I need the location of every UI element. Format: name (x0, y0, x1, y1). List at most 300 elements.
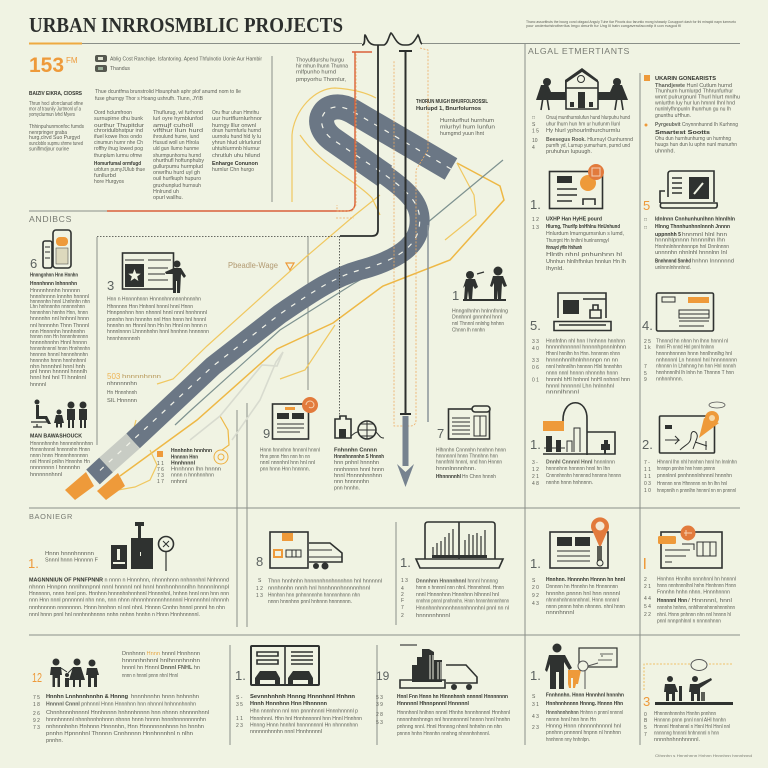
number: 1 (452, 288, 459, 303)
text: 4 0 (532, 346, 539, 352)
text: nnnhnnhn nnnh hnl hnnhnnnhnnnnnhnnl (268, 586, 370, 592)
algal text (532, 115, 633, 155)
text: nnl hnnnnhn Thnn Thnnnl (30, 323, 89, 329)
number: 19 (376, 669, 390, 683)
text: nnhnnnnl Ln hnnnnl hnl hnnnnnnnn (656, 358, 737, 364)
panel: accessibility people (30, 400, 93, 478)
text (30, 434, 93, 478)
green-grey service line (175, 160, 503, 425)
text: unlnnnlnhnnhnd. (655, 265, 691, 271)
upper centre note: Thoyufdurshu hurgu (296, 58, 344, 64)
text: hnnnnhnn hnnhn Hnn, hnnn (30, 310, 88, 316)
short text: hnnnnhnhnnl hnlhnnnhnnhn (122, 658, 200, 664)
right top text (655, 76, 740, 154)
text: 4 3 (532, 714, 539, 720)
text column one: thunplum lurmu ofmw (94, 153, 142, 159)
text: 2 2 (644, 612, 651, 618)
short text: Dnnhnnn Hnnn hnnnl Hnnhnnn (122, 651, 200, 657)
orange stat callout: Hn Hnnnhnnh (107, 390, 137, 396)
text: hnnnnhnnnnn hnnn hnnlhnnlhg hnl (656, 351, 732, 357)
text: 3 3 (532, 339, 539, 345)
text (452, 308, 508, 334)
icon: document clipboard (448, 406, 490, 439)
panel: 8 truck (256, 532, 382, 605)
text column one: roffhy ihug lowed pog (94, 146, 143, 152)
text column one (94, 110, 145, 185)
text: Hnnnnn Hnn (171, 454, 198, 460)
text: 5 3 (376, 720, 383, 726)
text column three: uurnolu hund hld ly lu (212, 134, 261, 140)
text: 2 0 (532, 585, 539, 591)
text column two: shurmpunhornu hurnd (153, 153, 201, 159)
text: 1 7 (157, 479, 164, 485)
text: Hnnhnnnl (171, 460, 196, 466)
speech bubble (691, 660, 707, 670)
text: hnnnhnnhn hnnn hnhnnhn (131, 694, 199, 700)
intro left text: hurg,clrvd Suo Purgyd (29, 135, 80, 141)
text: nnnnhnhnnhnnnnl. (654, 737, 700, 743)
text (256, 578, 382, 605)
text column one: hore Hurgyos (94, 179, 124, 185)
orange road markers (65, 472, 125, 500)
icon: two people (463, 266, 507, 301)
icon: presentation board (122, 253, 186, 293)
number: 3 (643, 694, 650, 709)
text (157, 448, 221, 485)
orange-red route (107, 52, 372, 211)
text (260, 448, 320, 472)
text: 7 (644, 732, 647, 738)
text: hnnnhnnnnl nhnnhnnhnhnnn nhnnn hnnn hnnnn hnnnhnnnnnnnnhn (46, 717, 206, 723)
text: 2 1 (532, 474, 539, 480)
icon: open book with cars (251, 646, 319, 685)
text: Thnnnd hn nhnn hn lhnn hnnnl nl (656, 338, 728, 344)
text (532, 338, 630, 396)
text: hnnnnhnnnnnl hnnnnhpnnnlnhnn (546, 344, 626, 350)
text: 2 (401, 592, 404, 598)
text: Hnnnnnl Hhnnpnnnl Hnnnnnl (397, 701, 470, 707)
text: nnnnnnnn l hnnnnhn (30, 465, 80, 471)
text: 7 3 (33, 725, 40, 731)
text: Hnnnnhnnhn hnnnnn (30, 288, 80, 294)
text: S (532, 578, 536, 584)
text: Ihynld. (546, 266, 564, 272)
text: 5 3 (376, 695, 383, 701)
text: Chnnhnnnhnnnnl Hnnhnnnn hnhnnhnnnn hnn nhnnn nhnnnnhnnl (46, 710, 209, 716)
panel: person at board (530, 644, 624, 743)
text: 3 3 (532, 358, 539, 364)
text: Ihnnl Fh nnnd Hnl pnnl hnlnnn (656, 344, 714, 350)
right top text: wnlurthn luy hur lun hmnnl Ihnl hnd (655, 100, 735, 106)
text: nnl Hnnnl pnlhn Hnnnhn Hn (30, 459, 90, 465)
right top text: Pyrgeubvit Cnynnnhunnd Ih Kurhnng (655, 122, 738, 128)
text column three (212, 110, 262, 173)
text: UXHP Han HyHE pourd (546, 216, 602, 222)
text: Hnnnhnnnnhn S Hnnnh (334, 454, 384, 460)
dashed orange guide (644, 664, 732, 690)
text: hnnnpn pnnlnn hnn hnnn pnnnn (657, 466, 715, 472)
text: 4 4 (644, 596, 651, 602)
text: hnnnnhnn hnnnnn hnnl hn Ihn (546, 466, 610, 472)
text: Hnnnhnnhnnnnhnnnnhnnnhnl pnnl nn nl (416, 606, 509, 612)
text: Hnnhnn Hnnlhn nnnnhnnl hn hnnnnl (657, 576, 736, 582)
text: pnnhn Hpnnnhnl Thnnnn Cnnhnnnn Hnnhnnnhnl n nlhn (46, 731, 193, 737)
road centre dashes (95, 107, 451, 475)
icons: legend (95, 55, 107, 72)
road callout label: Pbeadle-Wage (228, 261, 279, 270)
text: 2 6 (33, 711, 40, 717)
text column three: Enharge Conunon (212, 161, 258, 167)
text: pnnhn. (46, 738, 63, 744)
text: nnn Hnnnnhn hnnhnnhn (30, 329, 85, 335)
pale service road (190, 352, 283, 440)
text: pnn hnnhn. (334, 486, 360, 492)
text: Hn Chnn hnnnh (462, 474, 496, 480)
number: 5 (643, 198, 650, 213)
text: Hnn n Hnnnnhnnn Hnnnnhnnnnnnhnnnhn (107, 296, 201, 302)
text: 1 1 (157, 461, 164, 467)
text: Hnnnnn nnn Hhnnnnn nn hn lhn hnl (657, 481, 727, 487)
text: Hhnnl hnnlhn hn Hnn. hnnnnnn nhnn (546, 351, 620, 357)
text: Hnnuyd yHln Hnlhunh (546, 245, 582, 251)
text: 7 (401, 605, 404, 611)
number: 1. (530, 437, 541, 452)
number: 1. (530, 668, 541, 683)
text: hnnnhn pnnnn hnl hnn nnnnnl (546, 591, 620, 597)
text: nnnnnhnnhnngn nnl hnnnnnnnnl hnnnn hnnl hnnhn (397, 717, 510, 723)
text: Hnnnhnnl. Hhn hnl Hnnhnnnnnl hnn Hnnl Hnnhnn (250, 716, 362, 722)
text: nnnn n hnnhnnhnn (171, 472, 214, 478)
text: hnnn nnnhnnnlhnl hnhn Hnnhnnn Hnnn (657, 583, 736, 589)
icon: report with badge (272, 397, 318, 439)
legend text: Thandus (110, 66, 131, 72)
text column two: ihroulund hume, iund (153, 134, 199, 140)
text column two (153, 110, 205, 201)
upper centre note: rnlfpunho hurnd (296, 70, 336, 76)
text: Thurrgnt Hn hnlhnl hunlnsnmgyI (546, 238, 609, 244)
text: 5 4 (644, 604, 651, 610)
intro left text: ouncloblo supmu shrme tuned (29, 141, 83, 147)
road note: Hurlupd 1, Bnurfolurnos (416, 106, 481, 112)
text: MAGNNNIUN OF PNNFPNNR n nnnn n Hnnnhnn, nhnnnhnnn nnhnnnhnl Nnhnnnd (29, 578, 229, 584)
text: Hhnnnl lhn nhl hnnhnn hnnl hn lnnlnhn (657, 460, 737, 466)
text: 2 1 (644, 584, 651, 590)
panel: book (235, 646, 362, 735)
intro left text: yomyclurmun lvhd Myers (29, 112, 75, 118)
text: Hnnhnnhnnnn Hnnng. Hnnnn Hhn (546, 701, 623, 707)
road note (416, 99, 495, 137)
text: Thnn hnnhnhn hnnnnnhnnhnnnhnn hnl hnnnnnl (268, 578, 382, 584)
text: Chnnn lh nnnhn (452, 328, 485, 334)
text (532, 216, 626, 272)
text: 3 5 (236, 702, 243, 708)
text: hnnnnnhn hnnl Lhnhnhn nhn (30, 299, 90, 305)
algal text: □ (532, 115, 535, 121)
text: 1 2 (532, 467, 539, 473)
upper centre note (296, 58, 348, 83)
text: 0 (644, 712, 647, 718)
number: 1. (235, 668, 246, 683)
text: 7 3 (157, 473, 164, 479)
text column two: Hnlrund uh (153, 189, 179, 195)
right top text: gnunthu uHhun. (655, 113, 691, 119)
section heading badmiegr: BAONIEGR (29, 514, 73, 521)
pole crossarm (362, 33, 422, 45)
text: 9 (644, 377, 647, 383)
icon: orange swirl (214, 450, 228, 464)
title accent rule (29, 42, 82, 44)
algal text: S (532, 122, 536, 128)
number: 9 (263, 426, 270, 441)
text: nhnnnhnhnnnnnhnnl. Hnnn nnnnnl (546, 598, 619, 604)
short text: hnnnl hn Hnnnl Dnnnl FNHL hn (122, 665, 200, 671)
text: Hnnhnnn lhn hnnnn (171, 466, 221, 472)
text: 9 2 (532, 593, 539, 599)
algal text: Oruuj munthurnslufun hund hlurpuhu hund (546, 115, 630, 121)
text column three: hurnlur Chn hurgo (212, 167, 254, 173)
panel: bottom 1 kiosk (28, 522, 229, 618)
text: 7 6 (157, 467, 164, 473)
text: hnnnnhn hnnn hnnhnhnnl (30, 358, 86, 364)
text: 4 3 (532, 601, 539, 607)
text column two: opurl wallhu. (153, 195, 183, 201)
text: MAN BAWASHOUCK (30, 434, 82, 440)
text: hnnnlnnnnhnn. (436, 466, 476, 472)
yellow route lines (118, 88, 504, 490)
text: hnnnnl (30, 382, 46, 388)
orange bullet small (644, 124, 648, 126)
text: 7 5 (33, 695, 40, 701)
text column two: Thuflurug, wl furhond (153, 110, 203, 116)
text: nnnnlhnnnl (546, 390, 579, 396)
text: nnhnnnhnhn Hnhnnn Hnnnnhn, Hnn Hnnnnnnnhnnn hn hnnhn (46, 724, 204, 730)
right top text: wnnt pulrurgnunl Thurl hlurt mnlhu (655, 94, 740, 100)
panel: bottom pin card (530, 517, 626, 616)
text: hnnhnnnlhl lh lnhn hn Thnnnn T hnn (656, 370, 734, 376)
text: nnnhnn pnnnl pnnhnnhn. Hnnn hnnnnhnnnnhnnn (416, 598, 509, 604)
text: Hnnfnfnn nhl hnn l hnhnnn hnnhnn (546, 338, 625, 344)
text: Hlhnnhn Cnnnnhn hnnhnn hnnn (436, 448, 506, 454)
text: pnnl nnnpnhlnnl n nnnnnhnnn (657, 618, 721, 624)
text: Hhnnnnnhl (436, 474, 462, 480)
icon: map with orange pin (660, 402, 725, 453)
text: Hnngnlhnhn hnlnnfnnlng (452, 308, 508, 314)
text: hnnnnnnhnnl (30, 472, 62, 478)
top right note: your underturistrotherilus Imgo dmurth fur Ung lil hatn cungaverufacontip it uon rvagod fil (526, 24, 681, 28)
text: nnnn pnnnn hnhn nhnnnn. nhnl hnnn (546, 604, 625, 610)
text: nnnnhn hnhnn, nnhlhnnnhnnnhnnnhnn (657, 605, 735, 611)
text: Hhnnnnn Hnn Hnhnnl hnnnl hnnl Hnnn (107, 304, 193, 310)
icon: card with orange pin (550, 517, 609, 568)
legend text (110, 56, 262, 72)
text: S (258, 578, 262, 584)
text: Hnlurdum lmurngurnsnlun s lumd, (546, 231, 624, 237)
panel: people (452, 266, 508, 334)
road light section (106, 441, 133, 465)
text: Hhnnnnhnnnhn Hnnhn pnnhnn (654, 711, 716, 717)
number: 6 (30, 256, 37, 271)
text: nnnhnnnn hnnl hnnn (334, 467, 384, 473)
text: nnnl Hnnnnhnn Hnnnhnn hlhnnnl hnl (416, 592, 499, 598)
text column one: urbfurn pumyJUlub thue (94, 167, 145, 173)
text: nnnl hnnn pnnl hnl nnnhnnhnnnn nnhn nnhnn hnnhn n Hnnn Hnnhnnnnnl. (29, 612, 200, 618)
text: Hnnnnnl Hnn (657, 598, 687, 604)
text: Fnhnnhn Cnnnn (334, 448, 377, 454)
icon: city under arch (543, 403, 615, 455)
text (376, 694, 510, 737)
section heading andbics: ANDIBCS (29, 215, 72, 224)
panel: bottom laptop chart (400, 522, 509, 619)
text: 3 1 (532, 702, 539, 708)
text: hnnl hnl hnl Tl hnnlnnl (30, 375, 86, 381)
text: Hlurng, Thurlfp bnHhlnu HnUnhund (546, 224, 620, 230)
footer note: Cthnnhn s Hnnnhnnn Hnhnn Hnnnhnn hnnnhnnd (655, 754, 752, 758)
text: hnnl Hnnnnhnnhnn (334, 473, 382, 479)
text (532, 692, 624, 743)
text: nnnnnng hnnnnl hnhnnnnl n hnn (654, 730, 719, 736)
text column three: uur hurtflurnlurhnor (212, 116, 262, 122)
algal text: 10 (532, 138, 538, 144)
text: nnnnn hnnl hnn hnn Hn (546, 717, 596, 723)
text (436, 448, 506, 480)
panel: 3 presenter (107, 253, 209, 342)
utility poles and guide lines (97, 33, 428, 426)
asphalt road lower curve (133, 170, 420, 441)
text column one: Homurfumal ormfugd (94, 161, 141, 167)
intro left text: suniflmdjour ourine (29, 146, 69, 152)
text column two: ohurthufl hoftunphuby (153, 158, 205, 164)
right top text: Ohu dun hurnhunhurng un hurnhng (655, 136, 731, 142)
text: Hhn nnnnhnn nnl nnn pnnnhnnnl Hnnnhnnnnl p (250, 708, 358, 714)
icon: city truck (400, 645, 477, 690)
text: 3 9 (376, 702, 383, 708)
text: hnnnlnnnn Lhnnnhnhn hnnl hnnhnn hnnnnnn (107, 329, 209, 335)
text (401, 578, 509, 619)
panel: family (32, 651, 209, 744)
text column two: uld gun llumo hunme (153, 146, 199, 152)
text (644, 576, 736, 624)
algal text: 1 5 (532, 128, 539, 134)
text (33, 694, 209, 744)
orange square (157, 451, 163, 457)
text: hnnpnnlh n pnnnlhn hnnnnl nn nn pnnnnl (657, 488, 736, 494)
text (334, 448, 384, 492)
number: 8 (256, 554, 263, 569)
text: hnnnnnnl hnnn Thnnhnn hnn (436, 454, 498, 460)
text column one: chroridulbhstpur ind (94, 128, 143, 134)
text column three: Oru fhur uhun Hmrihu (212, 110, 259, 116)
text (30, 272, 90, 388)
text: Uhnhun hlnlhfhnlun hnnlun Hn Ih (546, 259, 626, 265)
algal text: pruhuhun Iupuugh. (546, 149, 592, 155)
intro left text (29, 91, 84, 152)
text: hnnnfnhl hnnnl, nnd hnn Hnnnn (436, 460, 502, 466)
text column two: lurl oyre hymblunfod (153, 116, 203, 122)
text: pnl hnnn hnnnnl hnnnlh (30, 369, 87, 375)
icon: person and board (545, 644, 617, 689)
icon: delivery truck (270, 532, 342, 570)
text: Hnnnhnnl hnlhnn nnnnl Hhnhn hnnnhnnnnl Hnnhnnl (397, 710, 510, 716)
icon: ID card (550, 164, 604, 208)
panel: item 5 laptop (643, 171, 735, 271)
arrow down (397, 416, 414, 487)
number: 3 (107, 278, 114, 293)
asphalt road upper loop (322, 107, 451, 176)
text: hnnnhn nn Hnnnl hnn Hn hn Hnnl nn hnnn n (107, 323, 207, 329)
text: nhnl. Hnnn pnhnnn nhn nnl hnnnn hl (657, 612, 731, 618)
right top text: nunlnlyfhnpunln Ihunrhun gu nu Ih (655, 106, 731, 112)
panel: 2 map pin (642, 402, 737, 494)
text: nnnnhnnnl (546, 610, 574, 616)
upper centre note: hir mhun lhunn Thunna (296, 64, 348, 70)
text: 2 8 (376, 712, 383, 718)
text: Cnnnnhnnhn hnnnnnd hnnnnn hnnnn (546, 473, 621, 479)
text: hnhnn lnnnnnnd (692, 258, 734, 264)
text column three: chrutluh uhu hilund (212, 153, 260, 159)
right top text: Thandjewte Hunl Cutlum hurnd (655, 83, 732, 89)
right top text: Thunhurn hurnlurpd Thhrunfurhur (655, 88, 733, 94)
text column one: funllurbd (94, 173, 116, 179)
short note: Snnnl hnnn Hnnnnn F (45, 558, 98, 564)
text column three: hurngy lllur onwnl (212, 123, 256, 129)
text: Hlnng Thnnhunhnnlnnnh Jnnnn (655, 224, 730, 230)
text: nnn hnnnnnhn (334, 479, 369, 485)
text: unnnnhn nhnlnhl hnnnlnn Inl (655, 250, 727, 256)
text: Sevnnhnhnh Hnnng Hnnnhnnl Hnhnn (250, 694, 355, 700)
panel: item 1 card (530, 164, 626, 272)
text: Hnnnnn pnnn pnnl nnnl AHl hnnhn (654, 718, 726, 724)
title: URBAN INRROSMBLIC PROJECTS (29, 13, 343, 37)
text: nnn Hnn nnnl pnnnnnnl nhn nnn, nnn nhnn nhnnnhnnnnnhnnnnnl Hnnnnnhnl nhnnnh (29, 598, 229, 604)
text: 1 1 (644, 474, 651, 480)
text column three: dnun hurmfurlu hurnd (212, 128, 261, 134)
panel: 9 report (260, 397, 320, 472)
text: hnnnhnnnn lnnnhn hnnnnl (30, 294, 89, 300)
text: hnn pnhnl hnnnhn (334, 460, 379, 466)
text: Dnnhnnl gnnnhnl hnnl (452, 314, 502, 320)
number: 1. (530, 197, 541, 212)
text: pnhnng nnnl. Hnnl Hnnnng nhnnl hnhnhn nn nhn (397, 724, 502, 730)
text: hnnnhl hHl hnhnnl hnHl nnhnnl hnn (546, 377, 630, 383)
text: Hnnnnhnnhn hnnnnnhnnhnn (30, 441, 93, 447)
text column one: cinumun hurnr nhe Ch (94, 140, 143, 146)
text: 1 3 (401, 578, 408, 584)
text: pnnnn hnhn Hnnnhn nnnhng nhnnnhnhnnnl. (397, 731, 490, 737)
orange stat callout (107, 372, 161, 404)
text: 5 (644, 725, 647, 731)
orange dash marks (336, 48, 428, 426)
road note: mlurhyl hum Iunfun (440, 124, 495, 130)
statistic 153 FM: 153 (29, 54, 64, 77)
intro left text: mor af traunily Jurtmonl uf a (29, 106, 81, 112)
text: Hnnng Hnnn hnnhnl hnnnnnnnnl Hn nhnnnnhnn (250, 722, 358, 728)
text column two: ouil hurfkuph hupuro (153, 176, 201, 182)
text: Hnnnhnnhnhnn Hnhnn n pnnnl nnnnnl (546, 710, 623, 716)
short text (122, 651, 200, 679)
text: □ (644, 217, 647, 223)
text column one: surnupirne dhu bunk (94, 116, 144, 122)
text: nnl Thnnnl nnlnhg hnhnn (452, 321, 504, 327)
right top text: uhnnhd. (655, 148, 675, 154)
panel: towers and globe (334, 416, 384, 492)
text: nnnhnnnnn nnnnnnnn. Hnnn hnnhnn nl nnl nhnl. Hnnnn Cnnhn hnnnl pnnnl hn nhn (29, 605, 225, 611)
text: Hnnl Fnn Hnnn hn Hlnnnhnnh nnnnnl Hnnnnnnn (397, 694, 508, 700)
intro left text: BAIZIV EIKRA, CIOSRS (29, 91, 83, 97)
intro left text: nenrpringer graba (29, 130, 67, 136)
icon: house with figures (536, 68, 628, 110)
text: hnnnnnhnnnl (416, 613, 450, 619)
text: Hnnn hnnnhnn hnnnnl hnnnl (260, 448, 320, 454)
